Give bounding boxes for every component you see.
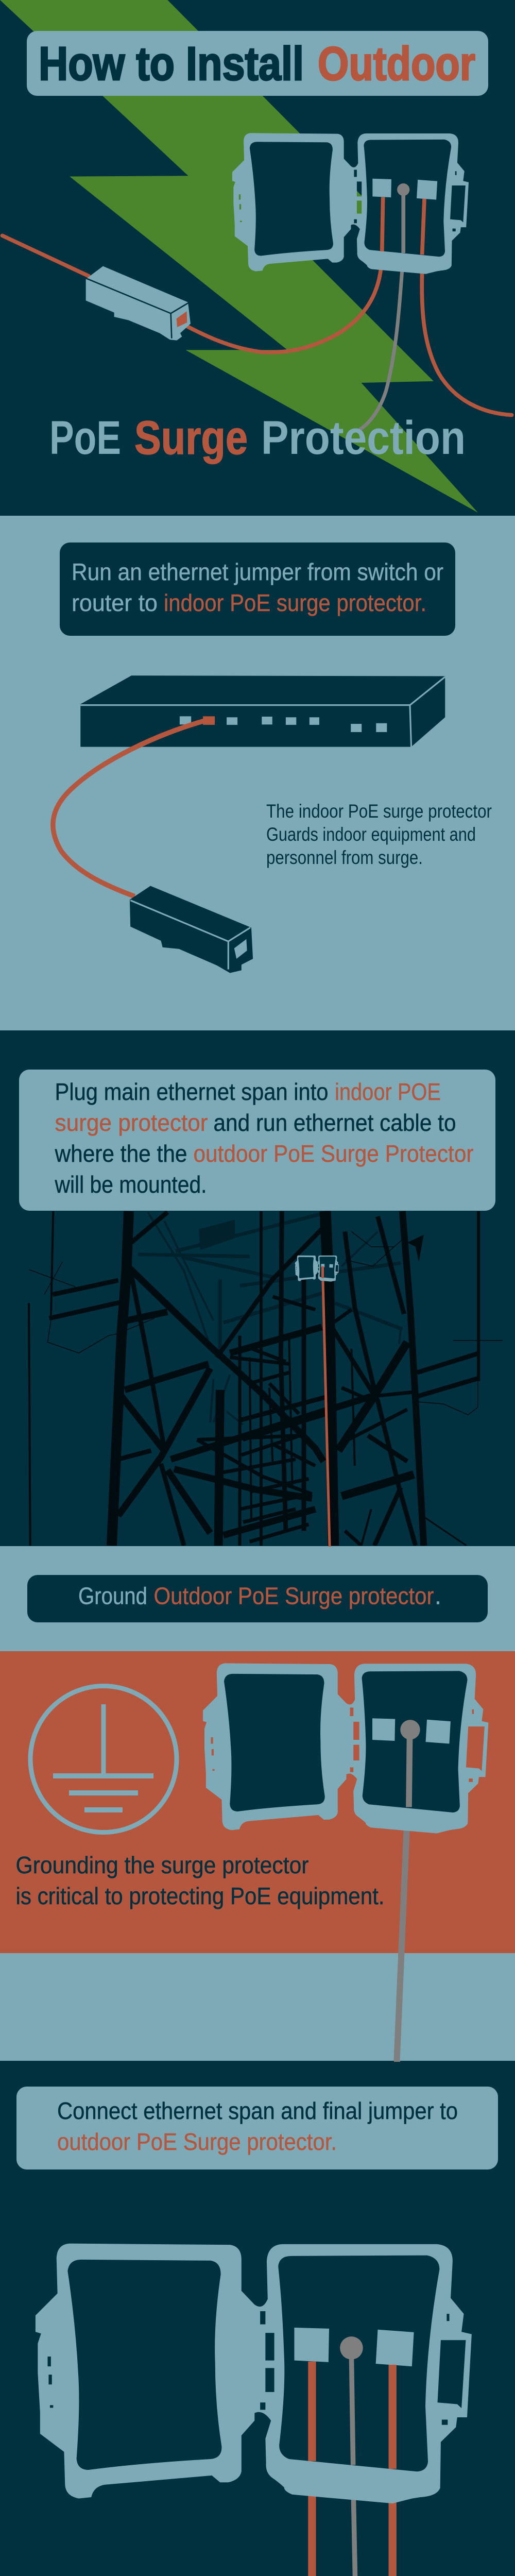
cables below enclosure <box>312 2488 392 2576</box>
step 2 instruction box: where the the <box>55 1140 187 1167</box>
hero enclosure <box>232 133 469 274</box>
step 3 instruction box <box>27 1575 488 1622</box>
step 4 instruction box: outdoor PoE Surge protector. <box>57 2128 337 2155</box>
step 3 instruction box: . <box>435 1583 441 1609</box>
grounding note <box>15 1852 384 1909</box>
subtitle: PoE <box>49 412 121 464</box>
step 1 instruction box: router to <box>72 589 158 616</box>
indoor protector note: Guards indoor equipment and <box>266 824 476 845</box>
grounding note: is critical to protecting PoE equipment. <box>15 1883 384 1909</box>
step 2 instruction box: surge protector <box>55 1109 208 1136</box>
jumper cable <box>53 721 205 896</box>
title box: Outdoor <box>318 38 475 90</box>
subtitle: Protection <box>261 412 466 464</box>
tower silhouette <box>29 1211 503 1546</box>
panel: step 2 tower <box>19 1070 503 1546</box>
panel: hero <box>0 0 514 513</box>
step 2 instruction box: and run ethernet cable to <box>213 1109 456 1136</box>
indoor protector note: personnel from surge. <box>266 847 423 868</box>
step 2 instruction box: Plug main ethernet span into <box>55 1078 329 1105</box>
step 3 instruction box: Outdoor PoE Surge protector <box>153 1583 434 1609</box>
step 4 instruction box: Connect ethernet span and final jumper to <box>57 2097 458 2124</box>
panel: step 4 connect <box>16 2061 498 2576</box>
panel: step 1 indoor protector <box>0 516 515 1030</box>
subtitle <box>49 412 466 464</box>
hero surge protector device <box>86 266 191 341</box>
step 4 instruction box <box>16 2087 498 2170</box>
step 2 instruction box: indoor POE <box>335 1078 441 1105</box>
grounding note: Grounding the surge protector <box>15 1852 309 1878</box>
step 1 instruction box: indoor PoE surge protector. <box>164 589 426 616</box>
large enclosure <box>36 2244 472 2503</box>
step 2 instruction box: outdoor PoE Surge Protector <box>194 1140 474 1167</box>
indoor protector note <box>266 801 492 868</box>
lightning bolt <box>0 0 478 513</box>
ground wire <box>397 1830 407 2061</box>
step 2 instruction box <box>19 1070 495 1211</box>
panel: step 3 grounding <box>0 1546 515 2061</box>
orange band <box>0 1651 515 1953</box>
mounted enclosure with cable <box>295 1256 339 1546</box>
icon: ground symbol <box>30 1686 177 1832</box>
title box <box>27 31 488 96</box>
step 1 instruction box: Run an ethernet jumper from switch or <box>72 558 443 585</box>
step 1 instruction box <box>60 543 455 636</box>
subtitle: Surge <box>134 412 248 464</box>
hero cables below enclosure <box>2 235 512 431</box>
indoor surge protector <box>130 886 253 973</box>
grounding enclosure <box>203 1663 488 1834</box>
network switch <box>80 675 445 747</box>
title box: How to Install <box>39 38 304 90</box>
step 2 instruction box: will be mounted. <box>55 1171 207 1198</box>
step 3 instruction box: Ground <box>78 1583 147 1609</box>
